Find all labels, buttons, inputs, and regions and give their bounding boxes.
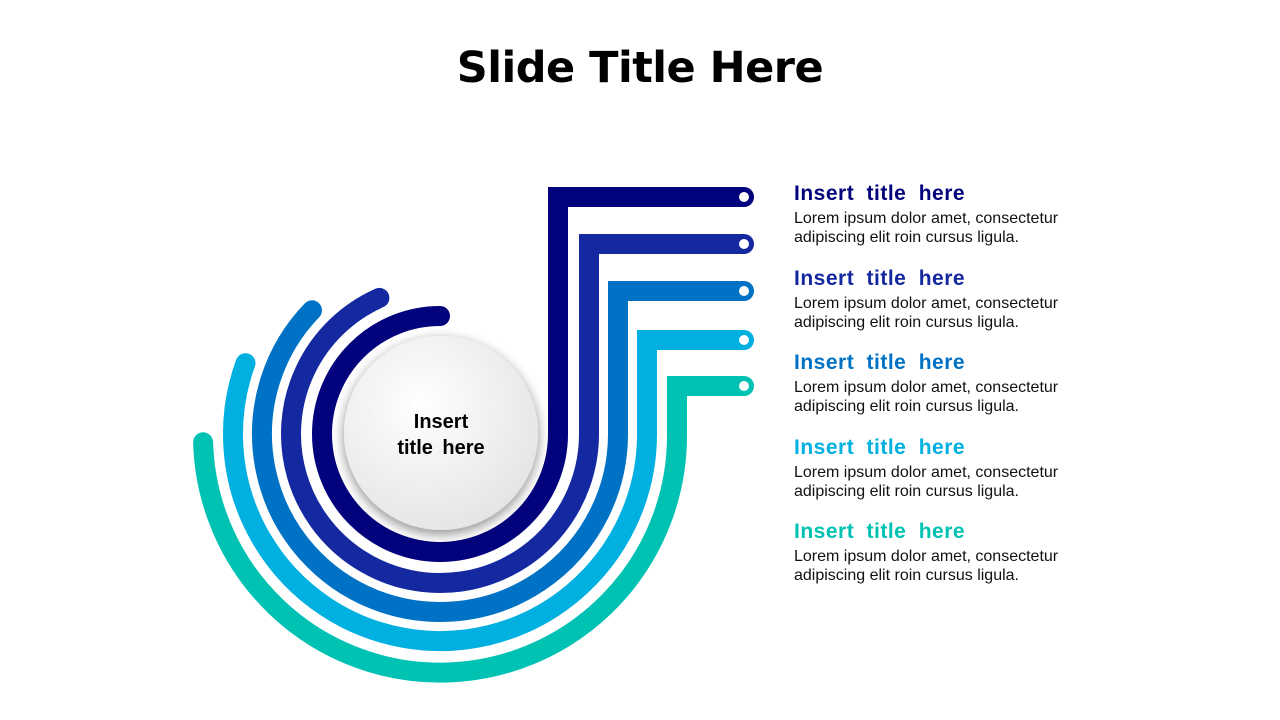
text item 1: Insert title here bbox=[794, 182, 965, 205]
arc 3: blue bbox=[262, 286, 749, 612]
text item 4: Lorem ipsum dolor amet, consectetur bbox=[794, 464, 1058, 481]
text item 2 bbox=[794, 267, 1058, 331]
text item 5: Insert title here bbox=[794, 520, 965, 543]
center circle: Insert bbox=[414, 411, 469, 433]
text item 3 bbox=[794, 351, 1058, 415]
text item 3: Lorem ipsum dolor amet, consectetur bbox=[794, 379, 1058, 396]
text item 1: adipiscing elit roin cursus ligula. bbox=[794, 229, 1019, 246]
text item 4: adipiscing elit roin cursus ligula. bbox=[794, 483, 1019, 500]
arc 1: navy bbox=[322, 192, 749, 552]
text item 3: Insert title here bbox=[794, 351, 965, 374]
text item 1 bbox=[794, 182, 1058, 246]
text item 3: adipiscing elit roin cursus ligula. bbox=[794, 398, 1019, 415]
text item 2: adipiscing elit roin cursus ligula. bbox=[794, 314, 1019, 331]
text item 4 bbox=[794, 436, 1058, 500]
text item 5: Lorem ipsum dolor amet, consectetur bbox=[794, 548, 1058, 565]
center circle: title here bbox=[397, 437, 485, 459]
title: Slide Title Here bbox=[457, 43, 823, 93]
arc 4: light blue bbox=[233, 335, 749, 641]
arc 5: teal bbox=[203, 381, 749, 673]
text item 2: Insert title here bbox=[794, 267, 965, 290]
arc 2: royal blue bbox=[291, 239, 749, 583]
text item 1: Lorem ipsum dolor amet, consectetur bbox=[794, 210, 1058, 227]
text item 5 bbox=[794, 520, 1058, 584]
text item 5: adipiscing elit roin cursus ligula. bbox=[794, 567, 1019, 584]
center circle bbox=[344, 336, 538, 530]
text item 4: Insert title here bbox=[794, 436, 965, 459]
text item 2: Lorem ipsum dolor amet, consectetur bbox=[794, 295, 1058, 312]
